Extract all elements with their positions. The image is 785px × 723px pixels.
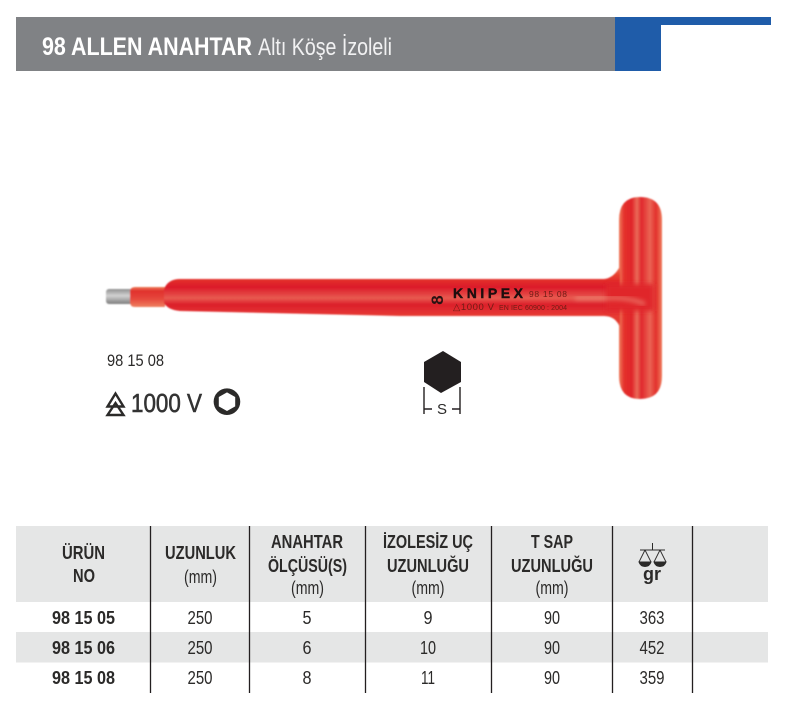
title: Altı Köşe İzoleli [258,34,392,61]
column headers: UZUNLUK [165,543,236,563]
icon: hexagon socket [214,388,240,415]
product image: insulated T-handle hex key [106,197,662,399]
column headers [62,532,661,598]
column headers: (mm) [291,578,324,598]
row: 98 15 05: 90 [544,608,560,628]
handle junction [606,284,654,311]
row: 98 15 05: 98 15 05 [52,608,115,628]
shaft lettering: KNIPEX [453,285,524,301]
shaft lettering: △1000 V [453,302,495,313]
row: 98 15 06: 90 [544,638,560,658]
icon: insulation triangles [108,394,124,415]
blue accent [615,17,771,71]
column headers: UZUNLUĞU [387,555,469,576]
shaft lettering [428,285,567,313]
row: 98 15 08: 250 [188,668,212,688]
row: 98 15 08: 90 [544,668,560,688]
shaft [164,266,620,328]
icon: weighing scale [639,543,666,566]
row: 98 15 08 [52,668,664,688]
column headers: (mm) [184,567,217,587]
row: 98 15 08: 8 [302,668,312,688]
hex bit [106,289,133,304]
column headers: (mm) [536,578,568,598]
row: 98 15 06: 98 15 06 [52,638,115,658]
column headers: gr [643,564,661,584]
column headers: UZUNLUĞU [511,555,593,576]
row: 98 15 06: 6 [302,638,312,658]
shaft lettering: EN IEC 60900 : 2004 [499,305,567,312]
row: 98 15 05: 250 [188,608,212,628]
shaft lettering: 98 15 08 [529,289,567,299]
column headers: ÖLÇÜSÜ(S) [268,556,347,576]
insulated neck [130,287,165,307]
T handle [619,197,662,399]
column headers: İZOLESİZ UÇ [383,532,473,552]
row: 98 15 06: 250 [188,638,212,658]
icon: hexagon dimension S: S [437,401,447,418]
row: 98 15 05: 9 [424,608,432,628]
shaft lettering: 8 [428,295,447,305]
row: 98 15 05 [52,608,664,628]
row: 98 15 06: 10 [420,638,436,658]
junction highlight [575,298,645,304]
specification table [16,526,768,693]
row: 98 15 06: 452 [640,638,664,658]
column headers: ÜRÜN [62,543,105,563]
icon: hexagon dimension S [424,351,461,418]
column headers: (mm) [412,578,444,598]
row: 98 15 08: 359 [640,668,664,688]
column headers: T SAP [531,532,573,552]
row: 98 15 08: 98 15 08 [52,668,115,688]
table bands [16,526,768,662]
column headers: NO [73,566,95,586]
row: 98 15 08: 11 [421,668,435,688]
title: 98 ALLEN ANAHTAR [42,33,252,61]
column headers: ANAHTAR [271,532,343,552]
row: 98 15 05: 5 [302,608,312,628]
voltage rating: 1000 V [131,388,203,418]
header banner [16,17,771,71]
row: 98 15 05: 363 [640,608,664,628]
row: 98 15 06 [52,638,664,658]
product code: 98 15 08 [107,351,164,370]
